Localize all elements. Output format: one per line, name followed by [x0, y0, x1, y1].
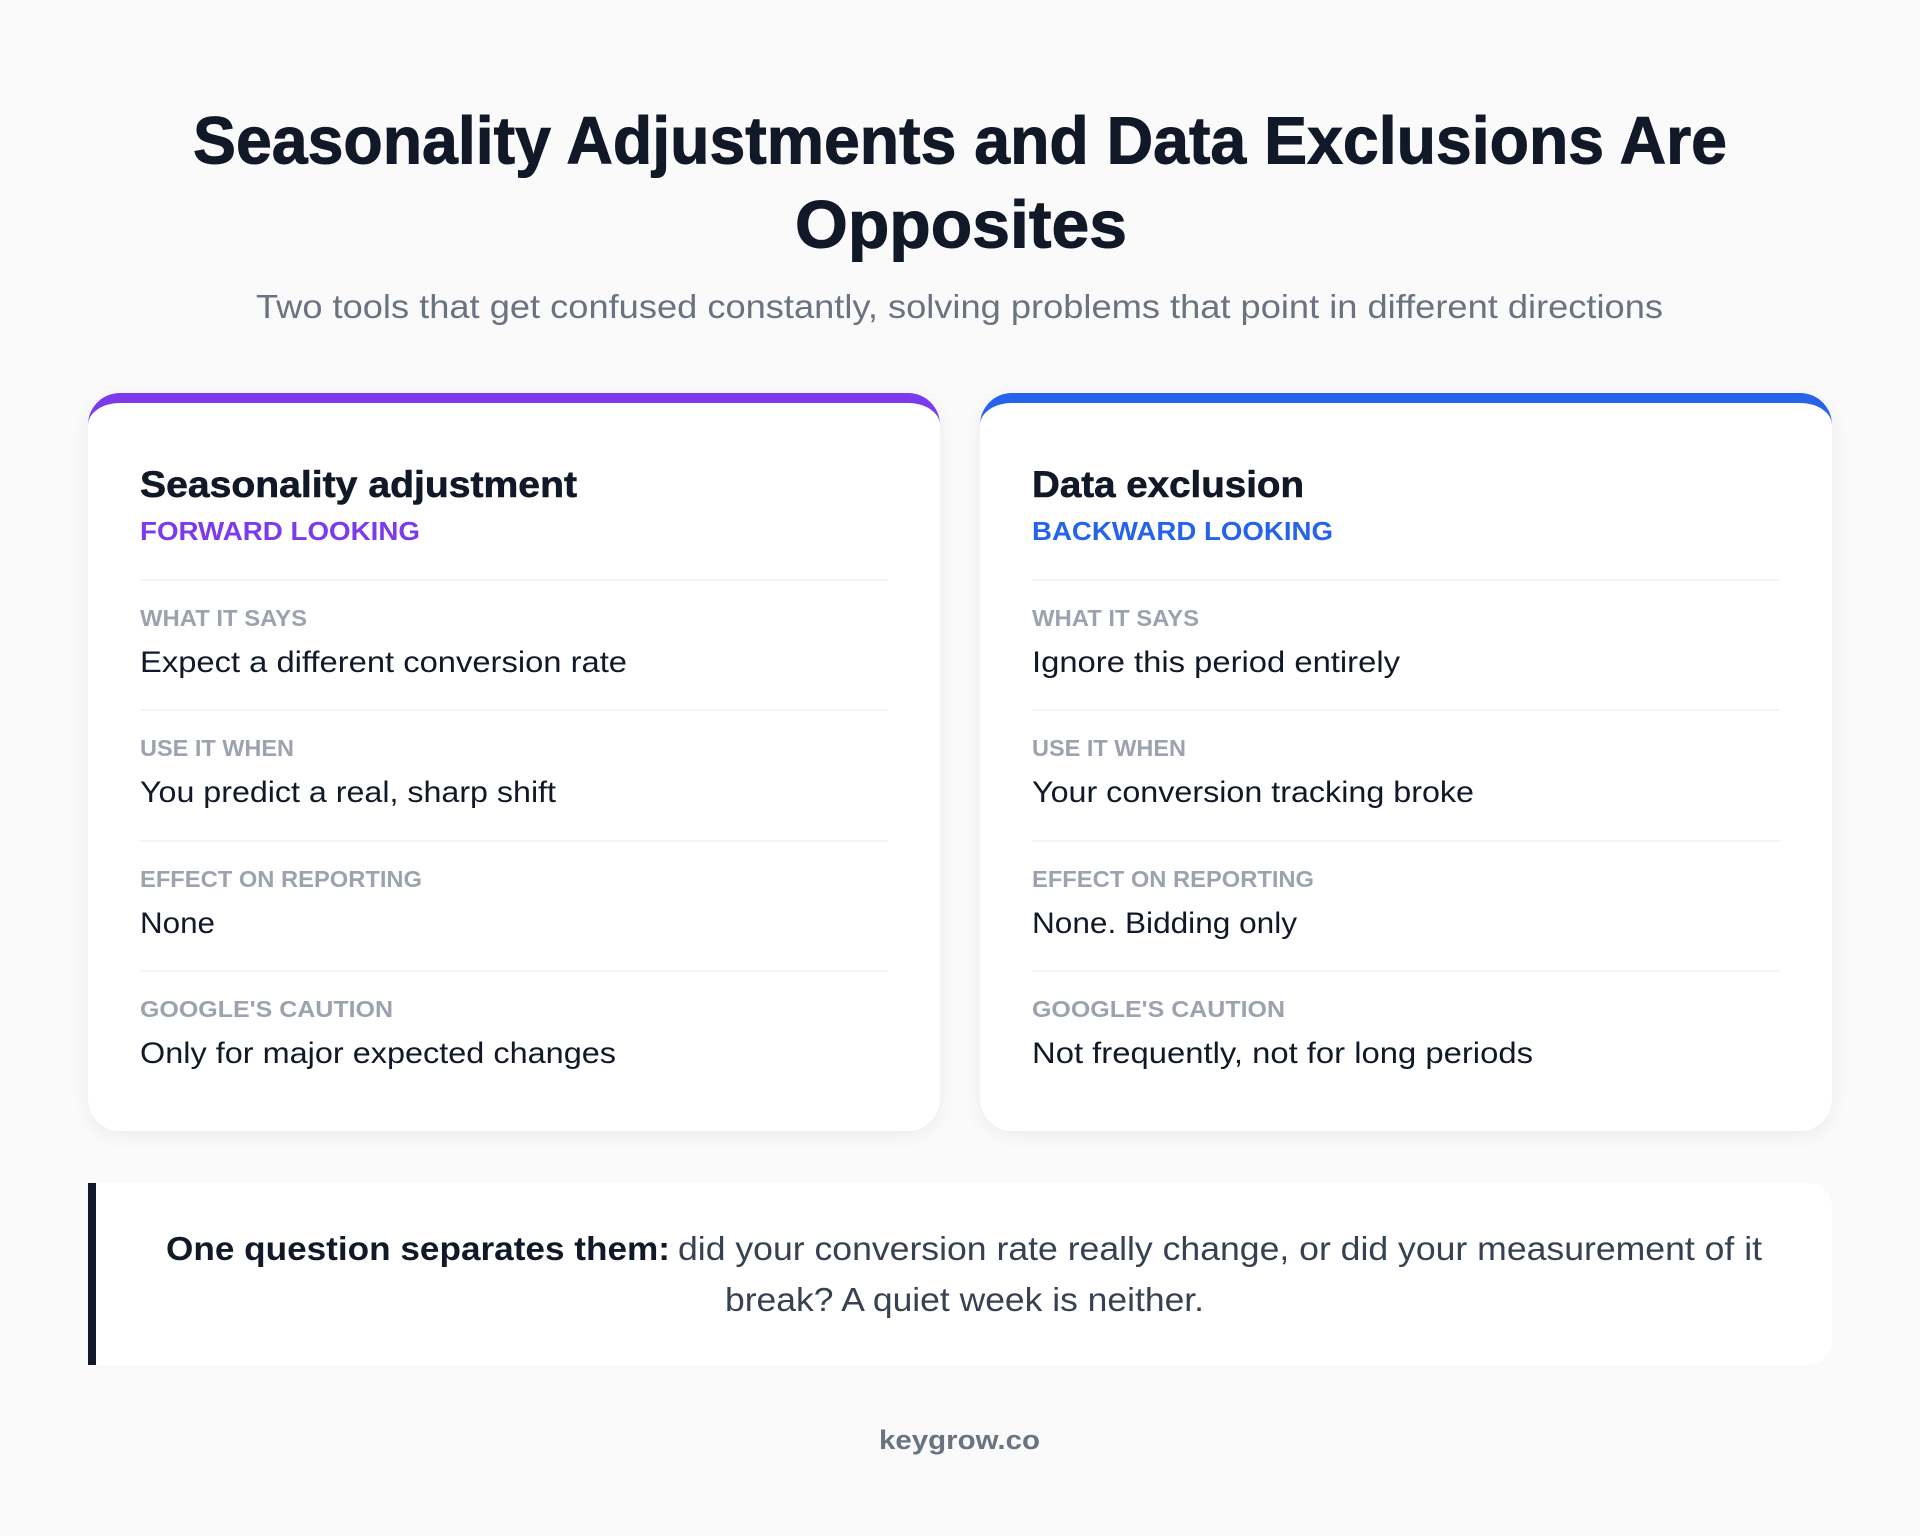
row: what it says: Ignore this period entirely	[1032, 646, 1400, 679]
row: effect on reporting: EFFECT ON REPORTING	[1032, 866, 1314, 892]
row: google's caution: GOOGLE'S CAUTION	[140, 996, 393, 1022]
callout text: did your conversion rate really change, or did your measurement of it	[678, 1230, 1762, 1267]
row: use it when: USE IT WHEN	[1032, 735, 1186, 761]
row: effect on reporting: None	[140, 907, 215, 940]
row: what it says: Expect a different conversion rate	[140, 646, 627, 679]
card heading: data exclusion	[1032, 464, 1333, 546]
row: what it says: WHAT IT SAYS	[1032, 605, 1199, 631]
row: google's caution: Not frequently, not for long periods	[1032, 1037, 1533, 1070]
title: Opposites	[795, 188, 1127, 262]
row: effect on reporting: EFFECT ON REPORTING	[140, 866, 422, 892]
card heading: data exclusion: BACKWARD LOOKING	[1032, 516, 1333, 546]
row: google's caution	[140, 996, 616, 1070]
row: use it when	[140, 735, 557, 809]
row: effect on reporting	[1032, 866, 1314, 940]
panel: seasonality adjustment	[88, 393, 940, 1131]
row: what it says	[140, 605, 627, 679]
title: Seasonality Adjustments and Data Exclusions Are	[193, 104, 1727, 178]
callout text: break? A quiet week is neither.	[725, 1281, 1204, 1318]
row: what it says	[1032, 605, 1400, 679]
row: google's caution: Only for major expected changes	[140, 1037, 616, 1070]
callout text: One question separates them:	[166, 1230, 670, 1267]
row: use it when	[1032, 735, 1474, 809]
panel: data exclusion	[980, 393, 1832, 1131]
row: use it when: You predict a real, sharp shift	[140, 776, 557, 809]
callout text	[166, 1230, 1762, 1318]
footer: brand: keygrow.co	[879, 1425, 1040, 1455]
row: google's caution	[1032, 996, 1533, 1070]
row: effect on reporting: None. Bidding only	[1032, 907, 1297, 940]
card heading: seasonality adjustment	[140, 464, 577, 546]
card heading: seasonality adjustment: Seasonality adjustment	[140, 464, 577, 505]
row: use it when: USE IT WHEN	[140, 735, 294, 761]
row: google's caution: GOOGLE'S CAUTION	[1032, 996, 1285, 1022]
card heading: data exclusion: Data exclusion	[1032, 464, 1304, 505]
card heading: seasonality adjustment: FORWARD LOOKING	[140, 516, 420, 546]
title	[193, 104, 1727, 262]
row: effect on reporting	[140, 866, 422, 940]
row: use it when: Your conversion tracking broke	[1032, 776, 1474, 809]
row: what it says: WHAT IT SAYS	[140, 605, 307, 631]
header: title and subtitle	[193, 104, 1727, 325]
callout	[88, 1183, 1832, 1365]
subtitle: Two tools that get confused constantly, solving problems that point in different directions	[256, 288, 1663, 325]
